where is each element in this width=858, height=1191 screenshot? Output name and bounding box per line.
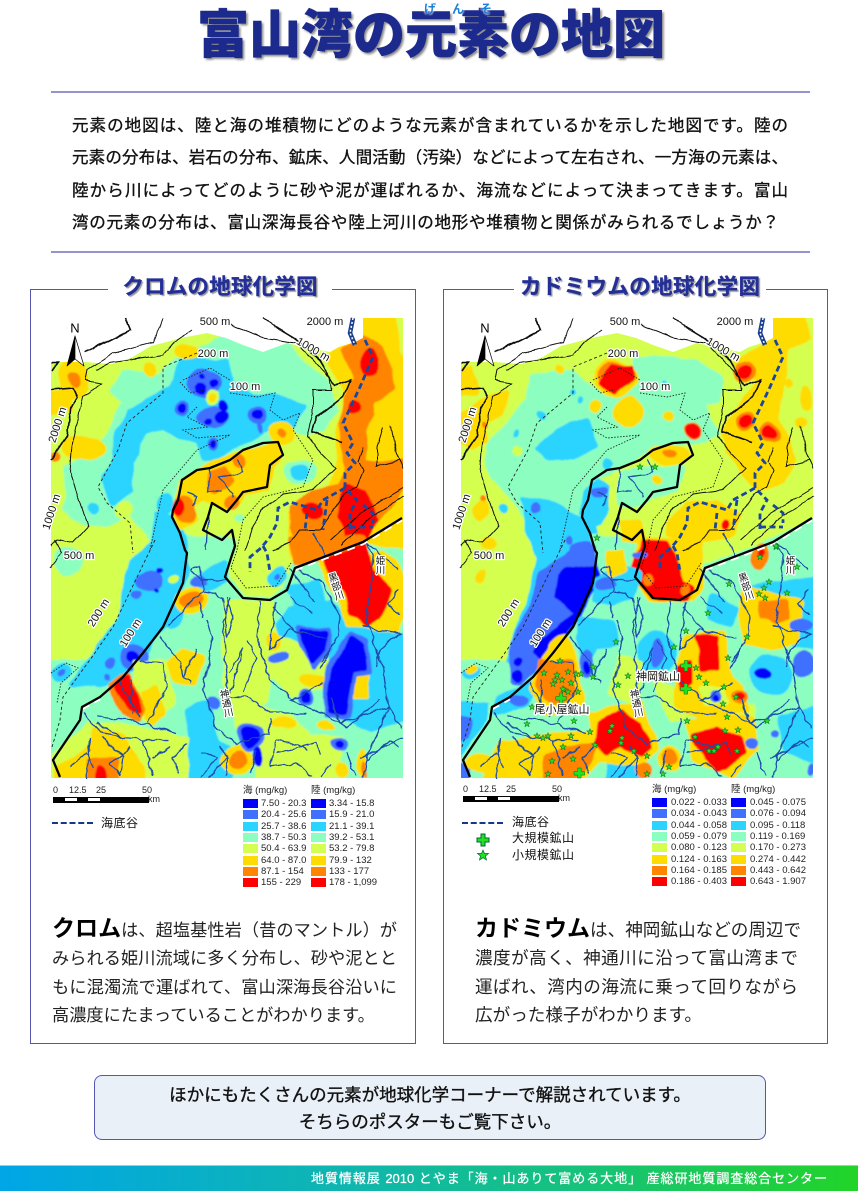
chromium legend: concentration classes: 39.2 - 53.1 — [329, 832, 374, 843]
chromium scale bar: km — [148, 794, 160, 804]
chromium explanation text — [52, 915, 397, 1025]
land areas — [276, 603, 413, 728]
chromium scale bar: 0 — [53, 785, 58, 795]
cadmium legend: concentration classes: 0.059 - 0.079 — [671, 831, 727, 842]
river labels — [217, 555, 385, 718]
cadmium geochemical map — [452, 317, 814, 779]
cadmium legend: concentration classes: 0.034 - 0.043 — [671, 808, 727, 819]
east band — [723, 308, 807, 490]
cadmium legend: concentration classes: 0.095 - 0.118 — [750, 820, 805, 831]
cadmium legend: concentration classes: 0.124 - 0.163 — [671, 854, 727, 865]
chromium explanation text: 高濃度にたまっていることがわかります。 — [52, 1005, 375, 1025]
chromium scale bar: 50 — [142, 785, 152, 795]
chromium legend: concentration classes: 3.34 - 15.8 — [329, 798, 374, 809]
chromium legend: concentration classes: 20.4 - 25.6 — [261, 809, 306, 820]
chromium legend: concentration classes: 53.2 - 79.8 — [329, 843, 374, 854]
title: 富山湾の元素の地図 — [197, 7, 665, 65]
heading: chromium map: クロムの地球化学図 — [122, 275, 318, 299]
chromium scale bar: 12.5 — [69, 785, 87, 795]
callout: other posters: そちらのポスターもご覧下さい。 — [299, 1112, 561, 1132]
chromium legend: valley: 海底谷 — [101, 816, 139, 830]
intro text block — [72, 116, 788, 232]
cadmium scale bar: 0 — [463, 784, 468, 794]
chromium concentration areas — [51, 318, 403, 778]
river labels: 神通川 — [627, 687, 644, 718]
chromium explanation text: みられる姫川流域に多く分布し、砂や泥とと — [52, 948, 397, 968]
cadmium legend: concentration classes: 0.186 - 0.403 — [671, 876, 727, 887]
chromium explanation text: もに混濁流で運ばれて、富山深海長谷沿いに — [52, 977, 397, 997]
chromium legend: concentration classes: 79.9 - 132 — [329, 855, 372, 866]
cadmium scale bar: 25 — [506, 784, 516, 794]
cadmium legend: symbols: 大規模鉱山 — [512, 831, 575, 845]
eastern high band — [291, 308, 413, 558]
cadmium legend: concentration classes: 陸 (mg/kg) — [731, 784, 775, 795]
north sea lows — [185, 370, 221, 396]
chromium legend: concentration classes: 64.0 - 87.0 — [261, 855, 306, 866]
river labels: 姫川 — [784, 555, 795, 574]
river labels: 黒部川 — [325, 571, 345, 602]
land cyan — [579, 618, 616, 663]
cadmium legend: concentration classes: 0.170 - 0.273 — [750, 842, 806, 853]
river labels: 姫川 — [374, 555, 385, 574]
mine stars — [524, 464, 800, 777]
chromium legend: concentration classes: 50.4 - 63.9 — [261, 843, 306, 854]
chromium legend: concentration classes: 7.50 - 20.3 — [261, 798, 306, 809]
chromium legend: concentration classes: 38.7 - 50.3 — [261, 832, 306, 843]
north highs — [592, 360, 638, 396]
intro text block: 元素の地図は、陸と海の堆積物にどのような元素が含まれているかを示した地図です。陸の — [72, 117, 788, 135]
cadmium explanation text: カドミウムは、神岡鉱山などの周辺で — [475, 915, 801, 941]
cadmium legend: symbols: 小規模鉱山 — [512, 848, 575, 862]
river labels — [627, 555, 795, 718]
cadmium concentration areas — [461, 318, 813, 778]
chromium legend: concentration classes: 155 - 229 — [261, 877, 301, 888]
chromium scale bar — [53, 785, 160, 804]
cadmium scale bar — [463, 784, 570, 803]
chromium legend: concentration classes — [243, 784, 377, 888]
Noto — [583, 480, 607, 530]
cadmium legend: concentration classes: 0.076 - 0.094 — [750, 808, 806, 819]
top-left yellow — [58, 360, 88, 400]
river labels: 神通川 — [217, 687, 234, 718]
chromium legend: concentration classes: 海 (mg/kg) — [243, 785, 287, 796]
cadmium scale bar: km — [558, 793, 570, 803]
contours, coast, rivers and labels — [451, 316, 813, 777]
cadmium legend: concentration classes: 0.119 - 0.169 — [750, 831, 805, 842]
footer bar — [0, 1165, 858, 1191]
cadmium explanation text: 広がった様子がわかります。 — [475, 1005, 702, 1025]
south strip lows — [136, 572, 164, 592]
cadmium explanation text — [475, 915, 801, 1025]
heading: chromium map — [108, 272, 332, 302]
Noto peninsula — [176, 443, 280, 530]
callout: other posters — [94, 1075, 766, 1140]
panel: chromium — [30, 289, 416, 1044]
intro text block: 陸から川によってどのように砂や泥が運ばれるか、海流などによって決まってきます。富山 — [72, 182, 788, 200]
cadmium explanation text: 運ばれ、湾内の海流に乗って回りながら — [475, 977, 798, 997]
large mine markers — [556, 660, 691, 778]
cadmium legend: symbols — [462, 815, 575, 862]
river labels: 黒部川 — [735, 571, 755, 602]
cadmium legend: concentration classes: 0.443 - 0.642 — [750, 865, 806, 876]
title: げんそ — [424, 2, 492, 16]
heading: cadmium map: カドミウムの地球化学図 — [520, 275, 760, 299]
red patch on bay coast — [635, 540, 701, 600]
contours, coast, rivers and labels — [41, 316, 403, 777]
cadmium legend: concentration classes: 0.643 - 1.907 — [750, 876, 806, 887]
intro text block: 元素の分布は、岩石の分布、鉱床、人間活動（汚染）などによって左右され、一方海の元素は、 — [72, 149, 788, 167]
footer bar: 地質情報展 2010 とやま「海・山ありて富める大地」 産総研地質調査総合センター — [311, 1171, 827, 1186]
cadmium legend: concentration classes: 0.044 - 0.058 — [671, 820, 727, 831]
cadmium legend: concentration classes: 0.022 - 0.033 — [671, 797, 727, 808]
mine name labels: 神岡鉱山 — [636, 669, 680, 683]
cadmium scale bar: 12.5 — [479, 784, 497, 794]
panel: cadmium — [443, 289, 828, 1044]
cadmium explanation text: 濃度が高く、神通川に沿って富山湾まで — [475, 948, 798, 968]
chromium legend: concentration classes: 25.7 - 38.6 — [261, 821, 306, 832]
cadmium legend: concentration classes: 0.080 - 0.123 — [671, 842, 727, 853]
cadmium scale bar: 50 — [552, 784, 562, 794]
chromium legend: concentration classes: 陸 (mg/kg) — [311, 785, 355, 796]
intro text block: 湾の元素の分布は、富山深海長谷や陸上河川の地形や堆積物と関係がみられるでしょうか？ — [72, 214, 779, 232]
chromium legend: concentration classes: 15.9 - 21.0 — [329, 809, 374, 820]
chromium legend: concentration classes: 21.1 - 39.1 — [329, 821, 374, 832]
chromium legend: concentration classes: 178 - 1,099 — [329, 877, 377, 888]
cadmium legend: symbols: 海底谷 — [512, 815, 550, 829]
cadmium legend: concentration classes — [652, 784, 806, 887]
cadmium legend: concentration classes: 海 (mg/kg) — [652, 784, 696, 795]
mine name labels — [534, 669, 680, 716]
land blue — [595, 578, 615, 592]
chromium legend: concentration classes: 87.1 - 154 — [261, 866, 304, 877]
land yellow/lime — [611, 658, 641, 703]
chromium geochemical map — [42, 317, 404, 779]
cadmium legend: concentration classes: 0.164 - 0.185 — [671, 865, 727, 876]
mine name labels: 尾小屋鉱山 — [534, 703, 590, 716]
callout: other posters: ほかにもたくさんの元素が地球化学コーナーで解説されています。 — [169, 1085, 691, 1105]
cadmium legend: concentration classes: 0.045 - 0.075 — [750, 797, 806, 808]
chromium explanation text: クロムは、超塩基性岩（昔のマントル）が — [52, 915, 397, 941]
chromium scale bar: 25 — [96, 785, 106, 795]
cadmium legend: concentration classes: 0.274 - 0.442 — [750, 854, 806, 865]
chromium legend: concentration classes: 133 - 177 — [329, 866, 369, 877]
